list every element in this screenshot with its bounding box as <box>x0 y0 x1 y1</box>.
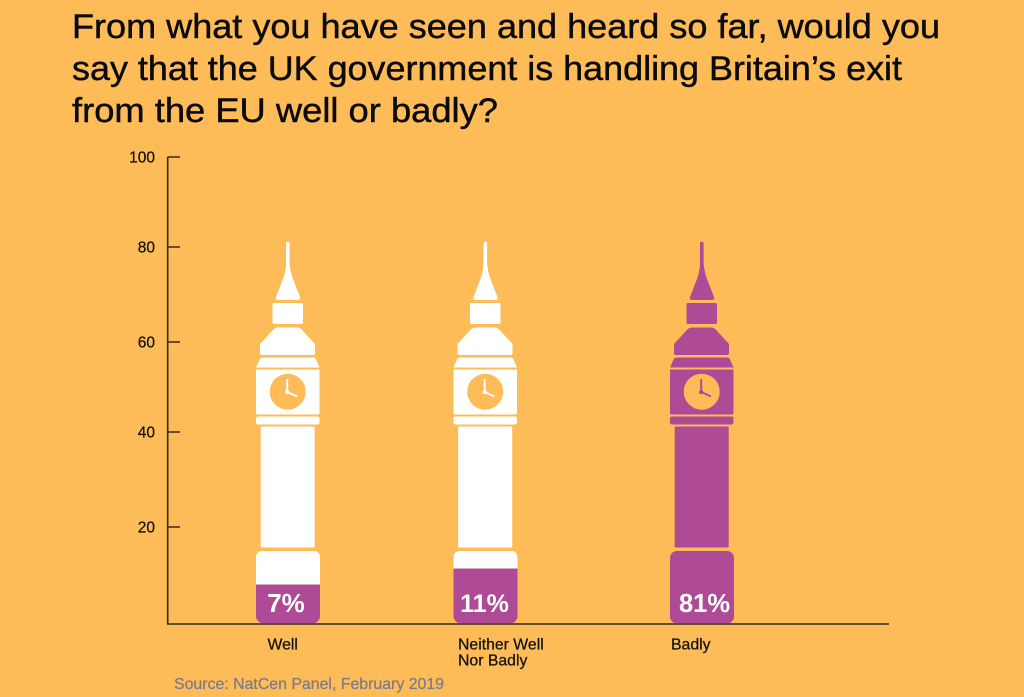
y axis with tick labels: 60 <box>138 334 155 352</box>
title: say that the UK government is handling Britain’s exit <box>72 50 903 88</box>
clock face <box>467 374 503 410</box>
category labels: Well <box>268 636 298 654</box>
category labels: Neither Well <box>458 636 544 654</box>
value label 81%: 81% <box>679 590 730 618</box>
y axis with tick labels: 100 <box>129 150 155 166</box>
clock face <box>270 374 306 410</box>
category labels <box>268 636 711 670</box>
title <box>72 8 940 130</box>
value label 11%: 11% <box>460 590 509 618</box>
title: From what you have seen and heard so far, would you <box>72 8 940 46</box>
tower: Well 7% <box>256 242 320 624</box>
purple fill 11% <box>454 568 518 624</box>
x axis baseline <box>167 623 889 625</box>
y axis with tick labels: 20 <box>138 520 155 536</box>
purple fill 7% <box>256 584 320 624</box>
source note: Source: NatCen Panel, February 2019 <box>174 676 444 693</box>
tower: Neither Well Nor Badly 11% <box>454 242 518 624</box>
value label 7%: 7% <box>267 588 305 618</box>
category labels: Nor Badly <box>458 652 527 670</box>
tower: Badly 81% <box>670 242 734 623</box>
category labels: Badly <box>671 636 711 654</box>
y axis with tick labels <box>129 150 180 624</box>
clock face <box>684 374 720 410</box>
y axis with tick labels: 80 <box>138 240 155 256</box>
title: from the EU well or badly? <box>72 92 498 130</box>
y axis with tick labels: 40 <box>138 424 155 442</box>
